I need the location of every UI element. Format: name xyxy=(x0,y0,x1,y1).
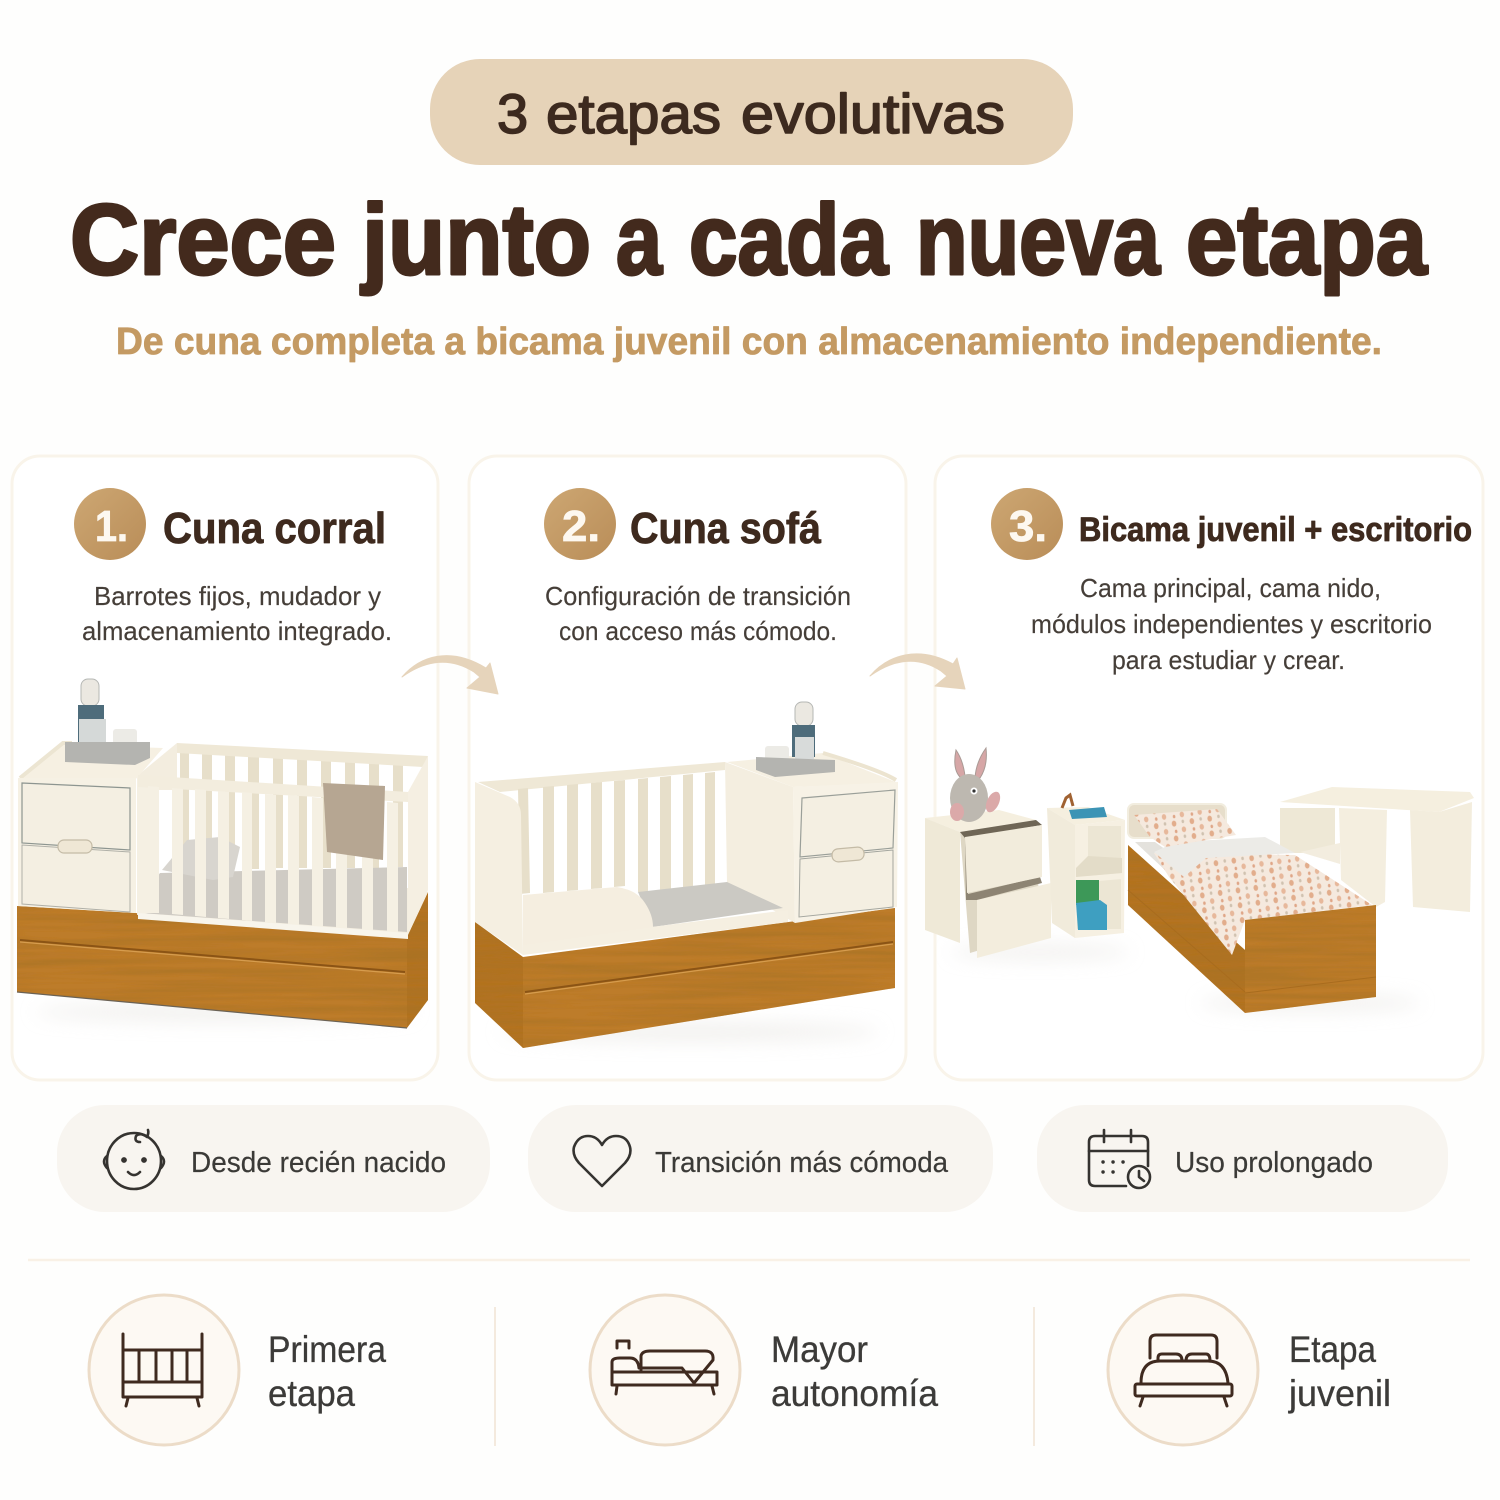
illustration: bed, drawers, shelf and desk xyxy=(925,748,1474,1013)
pillow xyxy=(162,837,240,880)
storage unit xyxy=(727,753,898,923)
wood base xyxy=(475,908,895,1048)
title: junto xyxy=(360,184,591,296)
label: Transición más cómoda xyxy=(655,1147,949,1179)
chip: transición más cómoda xyxy=(528,1105,993,1212)
title: Crece xyxy=(70,184,336,296)
changing unit xyxy=(18,743,163,913)
badge: 3 etapas evolutivas: etapas xyxy=(546,82,721,145)
description: bicama juvenil: para estudiar y crear. xyxy=(1112,645,1345,675)
title: a xyxy=(616,184,663,296)
back bars xyxy=(180,752,403,869)
icon: crib xyxy=(123,1334,202,1406)
badge: 3 etapas evolutivas xyxy=(430,59,1073,165)
illustration: sofa crib xyxy=(475,702,898,1048)
drawer unit xyxy=(925,810,1051,958)
label xyxy=(771,1329,938,1414)
blanket xyxy=(323,783,385,860)
subtitle: De cuna completa a bicama juvenil con almacenamiento independiente. xyxy=(116,321,1382,363)
heading: Cuna corral: Cuna corral xyxy=(163,504,386,553)
boxes xyxy=(1076,880,1099,905)
number badge 1 xyxy=(74,488,146,560)
label: Etapa xyxy=(1289,1329,1376,1370)
icon: double bed xyxy=(1135,1335,1232,1406)
chip: desde recién nacido xyxy=(57,1105,490,1212)
description: cuna sofá xyxy=(545,581,851,646)
badge: 3 etapas evolutivas: evolutivas xyxy=(741,82,1005,145)
description: bicama juvenil: Cama principal, cama nido, xyxy=(1080,573,1381,603)
platform and guard xyxy=(523,887,788,955)
stage: mayor autonomía xyxy=(590,1295,938,1445)
illustration: crib with changing unit xyxy=(17,679,428,1028)
toy and book xyxy=(1062,795,1107,819)
stage: primera etapa xyxy=(89,1295,386,1445)
description: cuna corral: Barrotes fijos, mudador y xyxy=(94,581,381,611)
title xyxy=(70,184,1428,296)
number badge 3: 3. xyxy=(1009,502,1047,551)
front rail and bars xyxy=(137,775,408,939)
arrow: etapa 1 a 2 xyxy=(402,656,498,694)
description: bicama juvenil xyxy=(1031,573,1432,675)
back rail and side panels xyxy=(177,743,428,767)
label: autonomía xyxy=(771,1373,938,1414)
label: etapa xyxy=(268,1373,355,1414)
label: Desde recién nacido xyxy=(191,1147,446,1179)
number badge 3 xyxy=(991,488,1063,560)
mattress xyxy=(638,882,783,927)
title: cada xyxy=(689,184,889,296)
arrow: etapa 2 a 3 xyxy=(870,654,965,689)
panel: bicama juvenil xyxy=(925,456,1483,1080)
tray with bottle xyxy=(65,679,150,765)
number badge 2: 2. xyxy=(562,502,600,551)
icon: calendar with clock xyxy=(1089,1130,1150,1188)
description: cuna sofá: Configuración de transición xyxy=(545,581,851,611)
panel: cuna sofá xyxy=(469,456,906,1080)
number badge 2 xyxy=(544,488,616,560)
heading: Bicama juvenil + escritorio: Bicama juvenil + escritorio xyxy=(1079,511,1472,549)
label: Uso prolongado xyxy=(1175,1147,1373,1179)
title: nueva xyxy=(916,184,1161,296)
label: Primera xyxy=(268,1329,386,1370)
icon: sofa bed xyxy=(612,1341,717,1394)
mattress xyxy=(140,867,407,932)
back bars xyxy=(518,772,715,894)
label xyxy=(268,1329,386,1414)
chip: uso prolongado xyxy=(1037,1105,1448,1212)
label: juvenil xyxy=(1288,1373,1391,1414)
shelf unit xyxy=(1047,807,1125,938)
wood base xyxy=(17,888,428,1028)
plush rabbit xyxy=(950,748,1003,822)
description: bicama juvenil: módulos independientes y escritorio xyxy=(1031,609,1432,639)
description: cuna sofá: con acceso más cómodo. xyxy=(559,616,837,646)
panel: cuna corral xyxy=(12,456,438,1080)
icon: baby face xyxy=(104,1130,164,1189)
badge: 3 etapas evolutivas: 3 xyxy=(497,82,528,145)
icon: heart xyxy=(574,1136,630,1186)
tray with bottle xyxy=(756,702,835,777)
stage: etapa juvenil xyxy=(1108,1295,1391,1445)
desk xyxy=(1280,787,1474,912)
heading: Cuna sofá: Cuna sofá xyxy=(630,504,821,553)
description: cuna corral xyxy=(82,581,392,646)
label: Mayor xyxy=(771,1329,868,1370)
bed xyxy=(1128,804,1376,1013)
cream panels xyxy=(475,762,795,955)
title: etapa xyxy=(1186,184,1428,296)
number badge 1: 1. xyxy=(95,502,128,551)
description: cuna corral: almacenamiento integrado. xyxy=(82,616,392,646)
label xyxy=(1288,1329,1391,1414)
back rail xyxy=(478,762,725,792)
